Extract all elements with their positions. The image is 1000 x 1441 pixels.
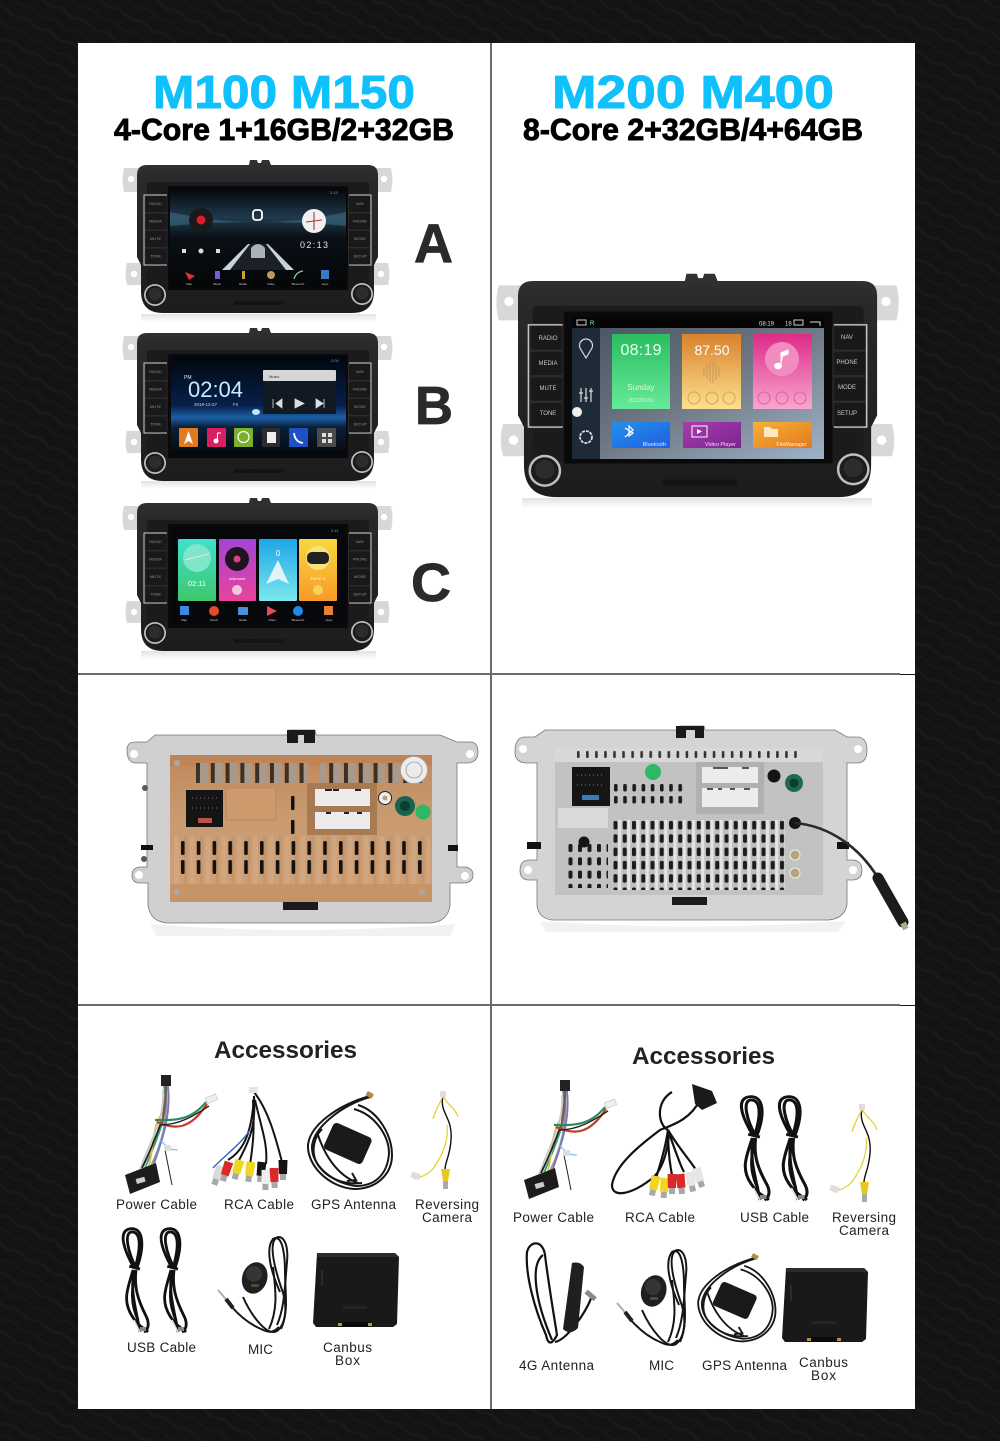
screen C (171, 526, 346, 625)
screen C: Music (210, 618, 218, 622)
unit A: head unit with clock screen: MEDIA (149, 218, 162, 224)
screen A: Bluetooth (292, 282, 305, 286)
unit A: head unit with clock screen: RADIO (149, 201, 162, 206)
screen A: Music (213, 282, 221, 286)
screen B: 2:04 (331, 358, 340, 363)
green QC sticker (645, 764, 661, 780)
white connectors (307, 783, 377, 835)
unit C: head unit with app cards screen: NAV (356, 539, 364, 544)
accessory: reversing camera: Reversing (832, 1210, 896, 1225)
screen C: 0 (276, 549, 281, 558)
accessory: GPS antenna: GPS Antenna (702, 1358, 787, 1373)
panel: M200 M400 rear view (491, 675, 915, 1005)
unit C: head unit with app cards screen: MODE (354, 574, 366, 579)
status bar (577, 320, 820, 328)
panel: M100 M150 front units (78, 43, 491, 674)
large head unit: RADIO (538, 336, 558, 342)
screen C: Bluetooth (292, 618, 305, 622)
screen B: 2019-12-27 (194, 402, 218, 407)
unit C: head unit with app cards screen: SETUP (353, 592, 367, 596)
unit B: head unit with music screen: SETUP (353, 422, 367, 426)
accessory: reversing camera (410, 1091, 479, 1225)
panel: M200 M400 front unit (491, 43, 915, 674)
title: M200 M400: M200 M400 (552, 66, 834, 118)
fins (172, 836, 430, 896)
copper rear unit (127, 730, 478, 936)
accessory: Canbus box: Canbus (323, 1340, 372, 1355)
tile: Bluetooth (612, 422, 670, 448)
unit A: head unit with clock screen (122, 160, 392, 322)
accessory: GPS antenna: GPS Antenna (311, 1197, 396, 1212)
screen: M200 launcher (572, 317, 824, 459)
unit C: head unit with app cards screen: MEDIA (149, 556, 162, 562)
unit B: head unit with music screen (122, 328, 392, 489)
large head unit: MEDIA (538, 361, 558, 367)
icon: location pin (580, 339, 593, 358)
screen B: Music (269, 374, 279, 379)
card: radio: 87.50 (694, 342, 730, 358)
accessory: Canbus box: Box (811, 1368, 836, 1383)
accessory: Canbus box (313, 1253, 399, 1368)
accessory: RCA cable (612, 1084, 717, 1225)
white seal (400, 756, 428, 784)
subtitle: 8-core memory options: 8-Core 2+32GB/4+64GB (523, 112, 863, 147)
screen A (170, 188, 346, 287)
screen C: Map (181, 618, 187, 622)
unit A: head unit with clock screen: TONE (150, 254, 161, 258)
accessory: GPS antenna (308, 1091, 396, 1212)
large head unit: TONE (540, 411, 556, 417)
card: clock (612, 334, 670, 409)
unit B: head unit with music screen: NAV (356, 369, 364, 374)
accessory: USB cable (123, 1229, 196, 1355)
gold antenna socket (378, 792, 392, 804)
panel: M100 M150 accessories (78, 1006, 491, 1409)
accessory: RCA cable (210, 1087, 294, 1212)
screen C: Video (268, 618, 276, 622)
large head unit: NAV (841, 335, 853, 341)
accessory: GPS antenna (698, 1253, 787, 1373)
screen C: 02:11 (188, 579, 206, 588)
accessory: reversing camera: Camera (839, 1223, 889, 1238)
screen A: Video (267, 282, 275, 286)
unit B: head unit with music screen: MUTE (150, 404, 161, 409)
screen C: Apps (326, 618, 333, 622)
card: clock: 2012/01/01 (628, 398, 654, 404)
accessory: USB cable: USB Cable (740, 1210, 809, 1225)
card: radio (682, 334, 741, 409)
letter A: A (414, 212, 453, 274)
black power connector (186, 790, 223, 827)
large head unit: MUTE (540, 386, 556, 392)
panel: M100 M150 rear view (78, 675, 491, 1005)
black power connector (572, 767, 610, 806)
accessory: reversing camera: Camera (422, 1210, 472, 1225)
accessory: power cable (513, 1080, 617, 1225)
accessory: RCA cable: RCA Cable (224, 1197, 294, 1212)
screen B (171, 356, 346, 455)
screen C: unknown (229, 576, 245, 581)
card: clock: 08:19 (620, 342, 662, 359)
white connectors (696, 762, 764, 814)
unit A: head unit with clock screen: MODE (354, 236, 366, 241)
letter B: B (415, 376, 453, 436)
accessory: MIC: MIC (649, 1358, 674, 1373)
panel: M200 M400 accessories (491, 1006, 915, 1409)
tile: Video Player (683, 422, 741, 448)
screen A: 02:13 (300, 240, 328, 250)
accessory: MIC (617, 1250, 686, 1373)
cable with jack plug (789, 817, 906, 929)
icon: gear (580, 431, 592, 443)
unit B: head unit with music screen: RADIO (149, 369, 162, 374)
card: music (753, 334, 812, 409)
title: M100 M150: M100 M150 (153, 66, 415, 118)
screen A: Map (186, 282, 192, 286)
unit B: head unit with music screen: MODE (354, 404, 366, 409)
tile: Bluetooth: Bluetooth (643, 442, 666, 448)
unit C: head unit with app cards screen: MUTE (150, 574, 161, 579)
unit C: head unit with app cards screen: RADIO (149, 539, 162, 544)
accessory: 4G antenna (519, 1243, 597, 1373)
accessory: MIC (218, 1237, 287, 1357)
unit B: head unit with music screen: PHONE (353, 386, 367, 392)
screen C: FM 87.5 (311, 576, 326, 581)
tile: FileManager (753, 422, 812, 448)
heading: Accessories: Accessories (632, 1043, 775, 1070)
subtitle: 4-core memory options: 4-Core 1+16GB/2+32GB (114, 112, 454, 147)
unit B: head unit with music screen: MEDIA (149, 386, 162, 392)
accessory: power cable (116, 1075, 218, 1212)
unit C: head unit with app cards screen (122, 498, 392, 659)
screen C: Radio (239, 618, 247, 622)
unit A: head unit with clock screen: NAV (356, 201, 364, 206)
status bar: 08:19 (759, 322, 775, 328)
accessory: reversing camera: Reversing (415, 1197, 479, 1212)
status bar: 18 (785, 322, 792, 328)
top vents (196, 763, 308, 783)
screen C: 2:11 (331, 528, 339, 533)
screen A: Apps (322, 282, 329, 286)
accessory: reversing camera (829, 1104, 896, 1238)
unit C: head unit with app cards screen: PHONE (353, 556, 367, 562)
icon: sliders (579, 388, 593, 402)
green antenna socket (395, 796, 415, 816)
screen A: Radio (239, 282, 247, 286)
screen B: Fri (233, 402, 238, 407)
accessory: USB cable (740, 1097, 809, 1225)
heading: Accessories: Accessories (214, 1037, 357, 1064)
accessory: USB cable: USB Cable (127, 1340, 196, 1355)
accessory: Canbus box: Box (335, 1353, 360, 1368)
unit A: head unit with clock screen: PHONE (353, 218, 367, 224)
large head unit: MODE (838, 385, 856, 391)
large head unit: PHONE (836, 360, 858, 366)
status bar: R (590, 321, 595, 327)
letter C: C (411, 553, 451, 613)
large head unit (496, 274, 899, 508)
tile: FileManager: FileManager (776, 442, 807, 448)
accessory: Canbus box: Canbus (799, 1355, 848, 1370)
green antenna socket (785, 774, 803, 792)
unit C: head unit with app cards screen: TONE (150, 592, 161, 596)
accessory: MIC: MIC (248, 1342, 273, 1357)
card: clock: Sunday (627, 383, 655, 392)
accessory: power cable: Power Cable (116, 1197, 197, 1212)
accessory: Canbus box (782, 1268, 868, 1383)
accessory: RCA cable: RCA Cable (625, 1210, 695, 1225)
unit A: head unit with clock screen: MUTE (150, 236, 161, 241)
lower slot rows (180, 841, 424, 874)
accessory: 4G antenna: 4G Antenna (519, 1358, 594, 1373)
accessory: power cable: Power Cable (513, 1210, 594, 1225)
unit B: head unit with music screen: TONE (150, 422, 161, 426)
screen B: 02:04 (188, 377, 243, 402)
unit A: head unit with clock screen: SETUP (353, 254, 367, 258)
tile: Video Player: Video Player (705, 442, 736, 448)
large head unit: SETUP (837, 411, 857, 417)
silver rear unit (515, 726, 906, 932)
screen B: PM (184, 375, 192, 381)
screen A: 2:13 (330, 190, 339, 195)
black socket (768, 770, 780, 782)
green QC sticker (416, 804, 430, 820)
top vents (577, 751, 797, 759)
